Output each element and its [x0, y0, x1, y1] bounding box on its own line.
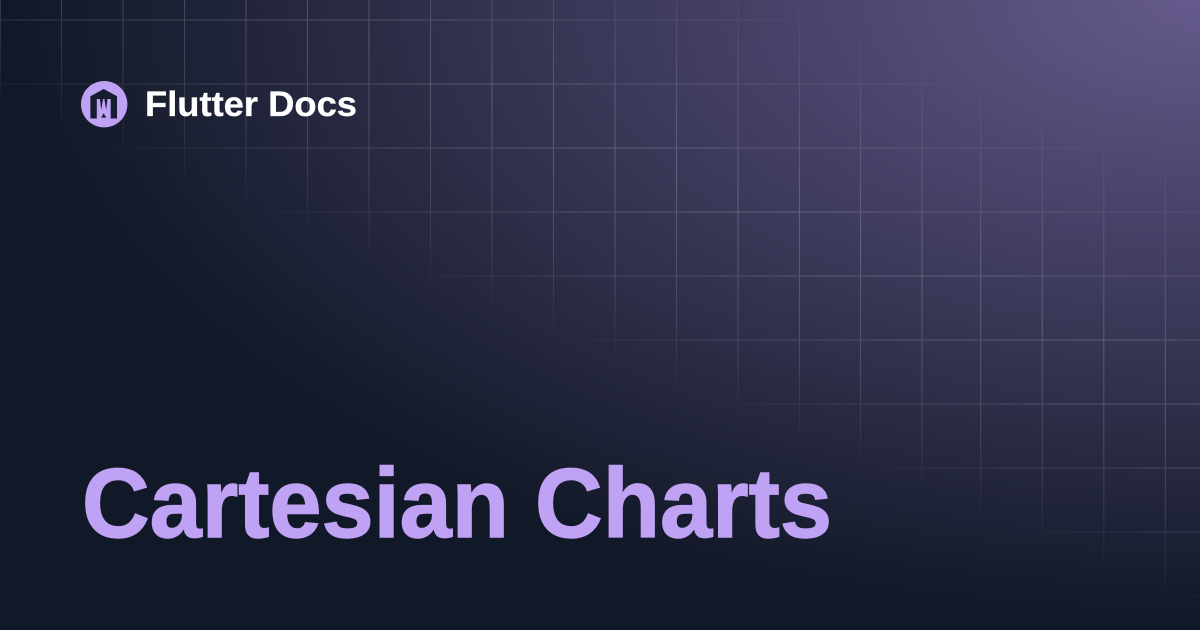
brand name: Flutter Docs: [145, 85, 357, 124]
title: Cartesian: [82, 448, 509, 558]
icon: shield badge: [81, 81, 127, 127]
title: Charts: [535, 448, 832, 558]
